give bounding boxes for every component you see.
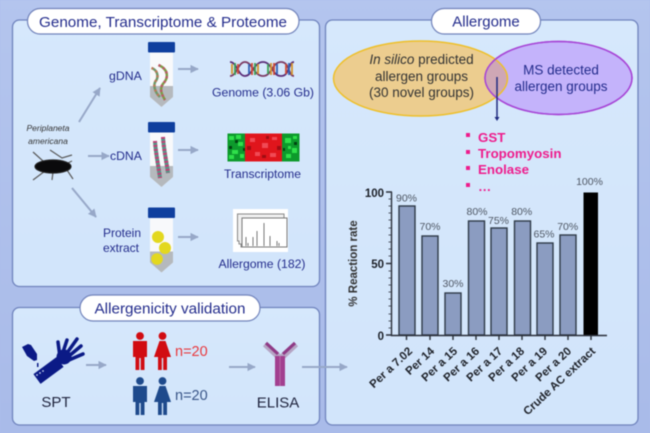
venn: MS detected: MS detected	[523, 62, 599, 78]
label: SPT: SPT	[41, 394, 71, 411]
category labels: Per a 15	[420, 345, 460, 384]
label: transcriptome: Transcriptome	[224, 169, 301, 181]
label: allergome count: Allergome (182)	[218, 259, 306, 271]
value labels: 65%	[533, 228, 555, 240]
species label: Periplaneta	[26, 123, 70, 133]
panel: allergenicity validation	[12, 295, 320, 425]
label: protein extract: extract	[103, 241, 140, 255]
icon: cDNA tube	[148, 122, 175, 187]
venn: in silico predicted: (30 novel groups)	[369, 85, 474, 100]
value labels	[396, 176, 603, 290]
axes	[386, 192, 607, 340]
venn: in silico predicted	[334, 41, 508, 116]
value labels: 100%	[576, 176, 603, 188]
icon: protein tube	[148, 208, 175, 272]
icon: antibody	[265, 343, 296, 386]
axis title: % Reaction rate	[348, 220, 360, 307]
icon: gloved hand and dropper	[22, 339, 83, 379]
arrow: to protein	[72, 188, 96, 217]
group: red participants	[133, 332, 208, 370]
value labels: 80%	[511, 206, 532, 218]
group: blue participants: n=20	[175, 388, 208, 404]
group: red participants: n=20	[175, 344, 208, 360]
arrow: overlap to list	[494, 77, 500, 121]
bar chart: reaction rate	[348, 176, 607, 418]
heading: genome panel	[28, 8, 299, 34]
category labels: Per a 7.02	[368, 345, 415, 391]
value labels: 90%	[396, 192, 417, 204]
heading: allergome: Allergome	[452, 14, 520, 31]
icon: mass spectra	[233, 209, 288, 252]
arrow: to gDNA	[79, 88, 100, 122]
category labels	[368, 345, 598, 418]
list: shared allergens: …	[478, 179, 491, 194]
category labels: Per a 19	[510, 345, 550, 384]
panel: allergome	[326, 8, 638, 425]
label: genome size: Genome (3.06 Gb)	[212, 88, 314, 100]
category labels: Per a 18	[487, 345, 527, 384]
heading: allergome	[432, 8, 540, 34]
label: ELISA: ELISA	[257, 394, 299, 412]
species label: americana	[28, 136, 68, 146]
icon: cockroach	[33, 150, 73, 180]
axis numbers	[365, 188, 384, 343]
venn: in silico predicted: allergen groups	[375, 69, 468, 84]
axis numbers: 100	[365, 188, 384, 200]
label: protein extract: Protein	[103, 226, 141, 240]
category labels: Crude AC extract	[521, 345, 598, 418]
venn: MS detected: allergen groups	[514, 79, 608, 94]
arrow: SPT to groups	[86, 364, 106, 366]
arrow: to allergome	[178, 236, 198, 238]
label: cDNA: cDNA	[110, 149, 143, 163]
bar: crude extract	[584, 192, 598, 335]
arrow: to genome	[178, 68, 198, 70]
list: shared allergens	[466, 130, 561, 194]
heading: genome panel: Genome, Transcriptome & Proteome	[39, 14, 287, 31]
bars	[399, 206, 576, 335]
icon: gDNA tube	[148, 42, 175, 107]
value labels: 70%	[557, 221, 578, 233]
axis numbers: 0	[378, 331, 384, 343]
arrow: to transcriptome	[178, 149, 198, 151]
arrow: ELISA to chart	[302, 366, 347, 368]
heatmap: transcriptome	[228, 134, 300, 162]
heading: allergenicity validation	[80, 295, 260, 321]
list: shared allergens: GST	[478, 130, 505, 145]
arrow: groups to ELISA	[229, 366, 255, 368]
list: shared allergens: Enolase	[478, 162, 529, 177]
arrow: to cDNA	[88, 155, 109, 157]
panel: genome, transcriptome and proteome	[12, 8, 320, 286]
value labels: 75%	[488, 215, 509, 227]
axis numbers: 50	[371, 259, 384, 271]
heading: allergenicity validation: Allergenicity validation	[94, 300, 246, 318]
value labels: 70%	[419, 221, 441, 233]
category labels: Per a 16	[442, 345, 482, 384]
value labels: 30%	[442, 278, 464, 290]
venn: in silico predicted: In silico predicted	[369, 52, 474, 67]
group: blue participants	[133, 377, 208, 415]
value labels: 80%	[466, 206, 488, 218]
label: gDNA: gDNA	[109, 69, 143, 83]
icon: DNA helix	[230, 62, 294, 76]
category labels: Per 14	[404, 345, 437, 378]
venn: MS detected	[484, 40, 634, 116]
category labels: Per a 17	[465, 345, 505, 384]
list: shared allergens: Tropomyosin	[478, 146, 561, 161]
category labels: Per a 20	[534, 345, 574, 384]
